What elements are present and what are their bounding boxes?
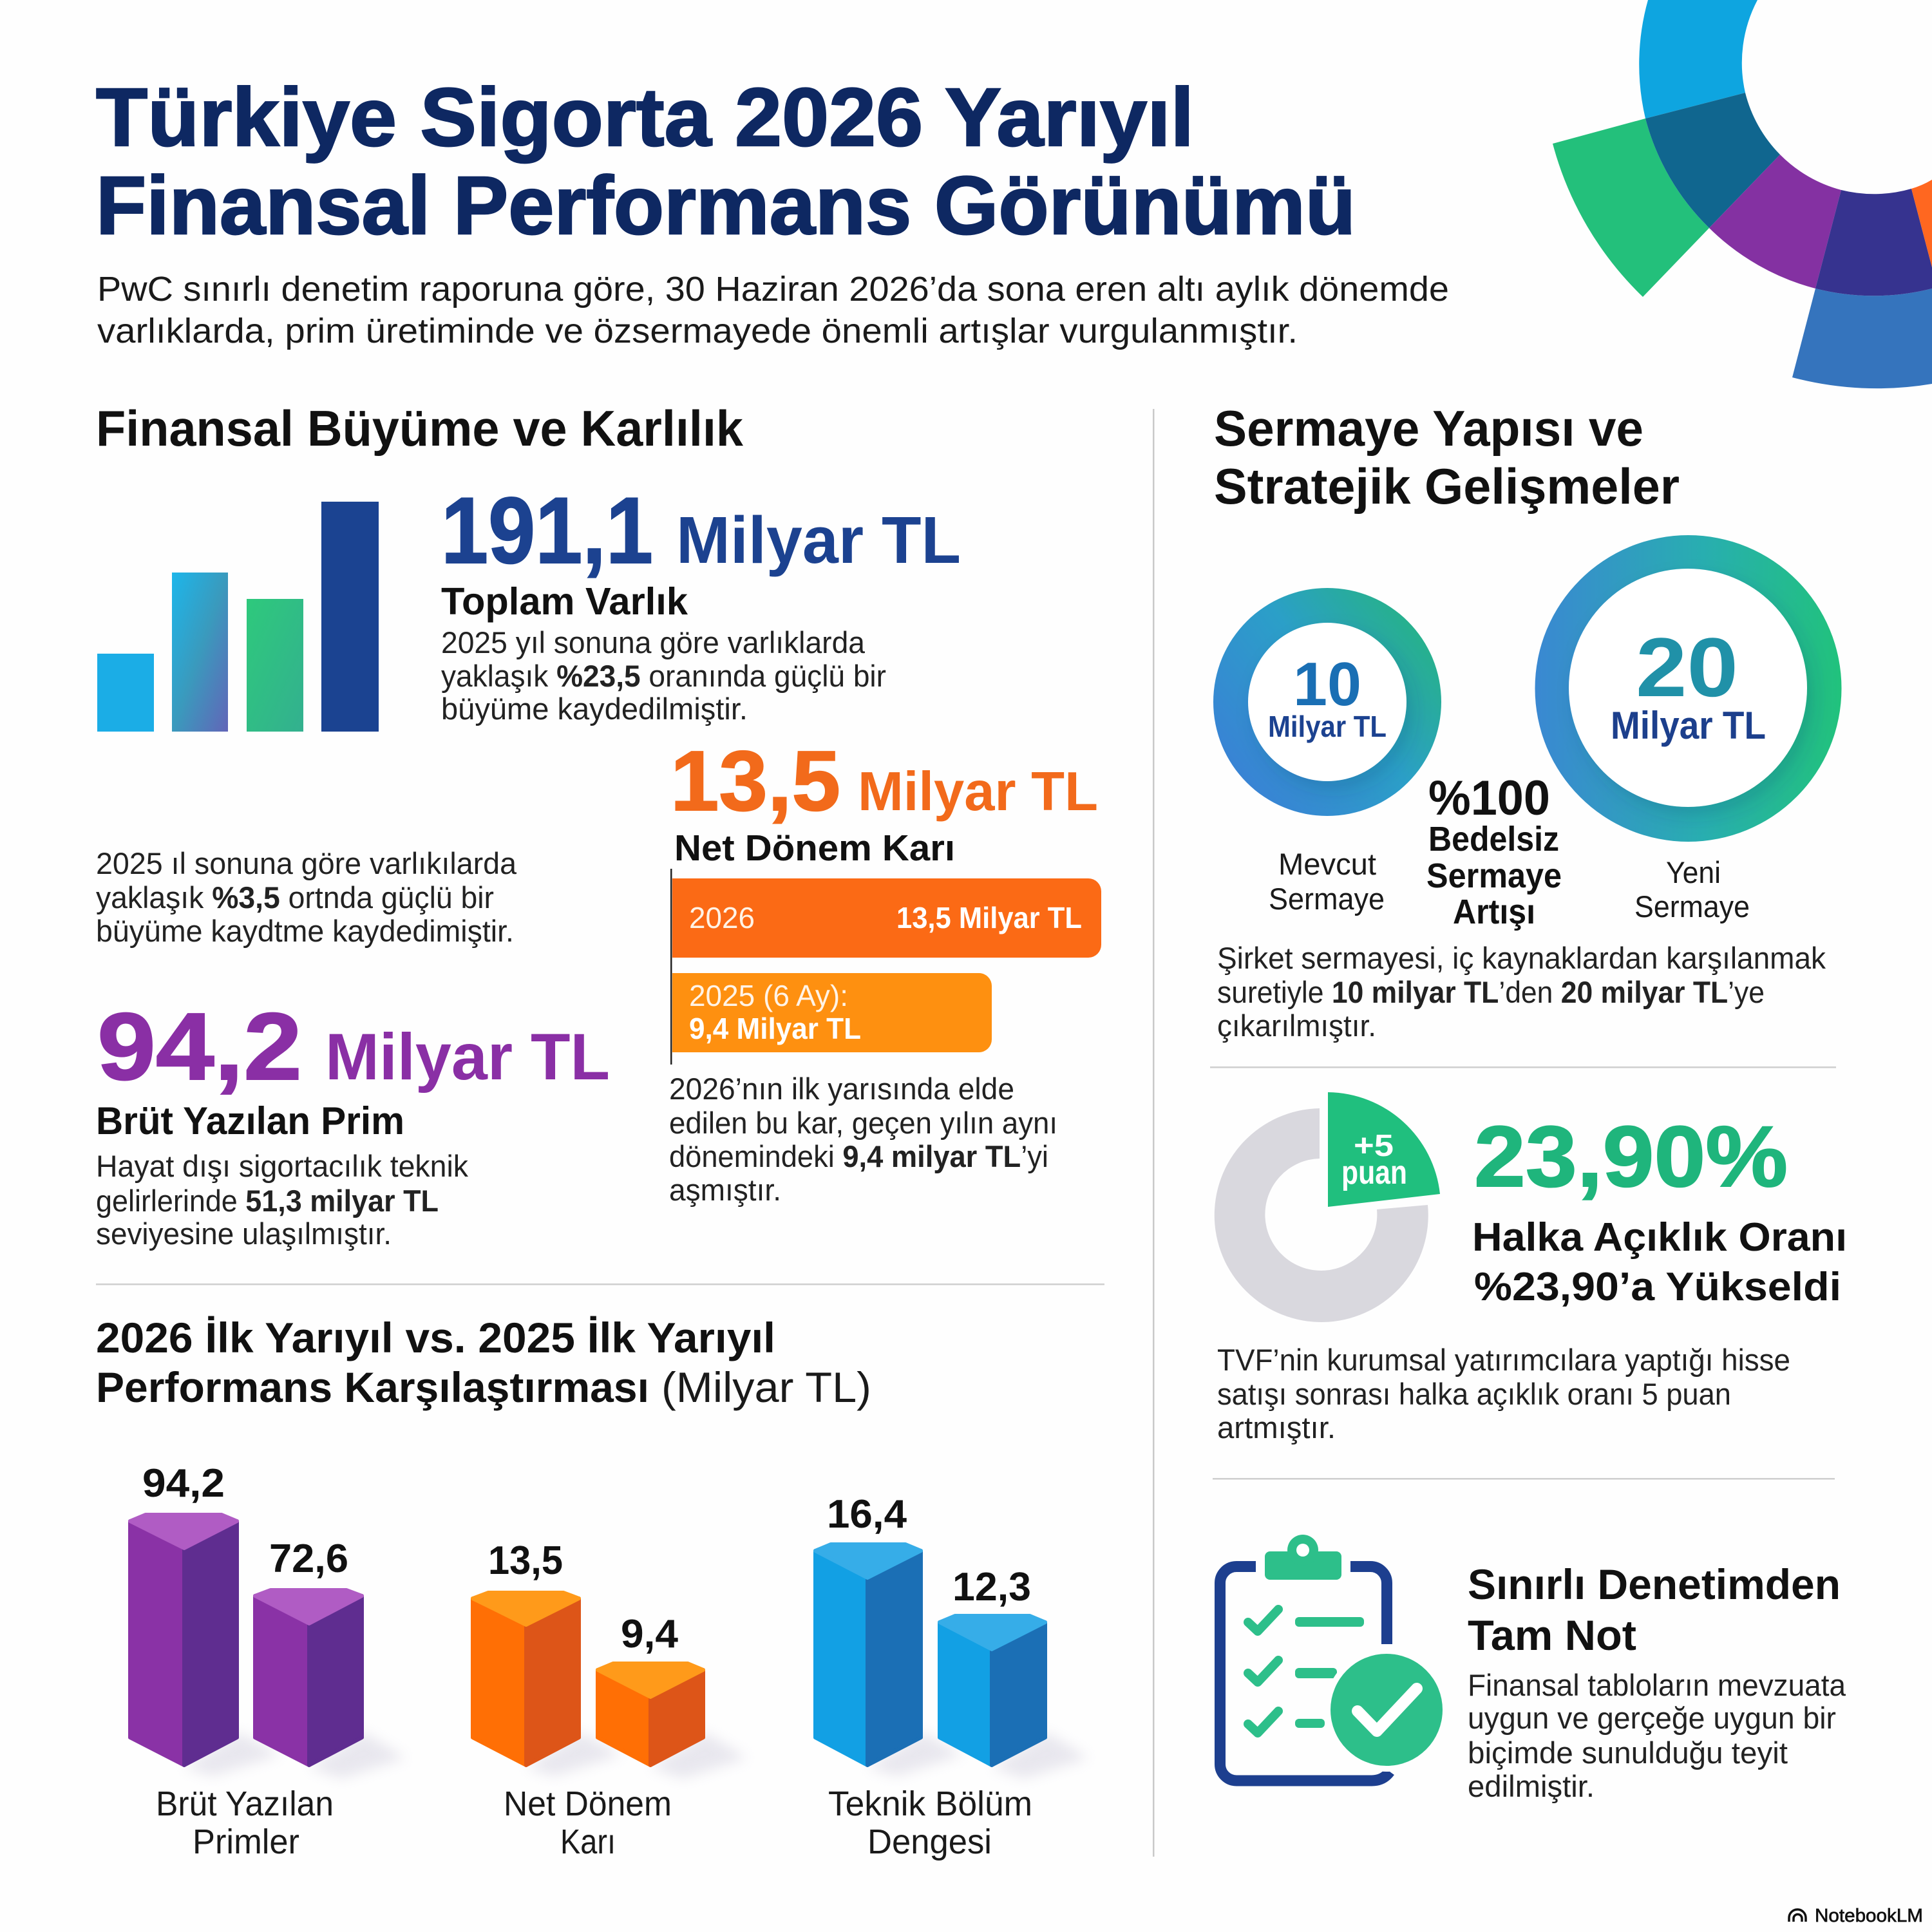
panel: financial growth and profitability (96, 400, 1101, 1251)
heading: Sermaye Yapısı ve Stratejik Gelişmeler (1214, 400, 1680, 515)
heading: comparison: Performans Karşılaştırması (96, 1363, 649, 1411)
text block: growth note (96, 846, 517, 948)
text block: growth note: büyüme kaydtme kaydedimiştir. (96, 914, 514, 948)
section divider (1210, 1066, 1836, 1068)
text block: free float explanation (1217, 1343, 1790, 1444)
chart: net profit comparison bars: 13,5 Milyar TL (896, 901, 1082, 934)
text block: capital explanation: suretiyle 10 milyar TL’den 20 milyar TL’ye (1217, 975, 1765, 1009)
stat: net period profit: Net Dönem Karı (674, 828, 955, 869)
label: Mevcut Sermaye: Sermaye (1269, 882, 1385, 916)
stat: total assets: Milyar TL (676, 503, 961, 577)
title (96, 71, 1356, 252)
text block: audit explanation: biçimde sunulduğu teyit (1468, 1736, 1788, 1770)
chart: free float donut (1215, 1092, 1440, 1322)
stat: gross written premium (96, 994, 610, 1251)
text block: capital explanation: Şirket sermayesi, iç kaynaklardan karşılanmak (1217, 941, 1826, 975)
stat: gross written premium: Brüt Yazılan Prim (96, 1099, 404, 1142)
ring: new capital 20: Milyar TL (1611, 704, 1766, 747)
heading: Sınırlı Denetimden Tam Not (1468, 1560, 1841, 1659)
chart: free float donut: puan (1341, 1154, 1407, 1191)
stat: total assets: Toplam Varlık (441, 580, 688, 623)
icon: clipboard with check (1220, 1535, 1448, 1781)
NotebookLM logo: NotebookLM (1815, 1906, 1923, 1926)
stat: gross written premium: Hayat dışı sigortacılık teknik (96, 1149, 468, 1183)
text block: audit explanation: uygun ve gerçeğe uygun bir (1468, 1701, 1836, 1735)
bar shadows (184, 1732, 1088, 1779)
section divider (1213, 1478, 1835, 1480)
ring: current capital 10: Milyar TL (1268, 710, 1387, 743)
decorative ring graphic top right (1553, 0, 1932, 388)
chart: net profit comparison bars: 2026 (689, 901, 755, 934)
ring: new capital 20 (1535, 535, 1842, 842)
text block: audit explanation: Finansal tabloların mevzuata (1468, 1668, 1846, 1702)
section divider (96, 1283, 1104, 1285)
label: Net Dönem Karı (504, 1785, 672, 1861)
heading: Sermaye Yapısı ve Stratejik Gelişmeler: Sermaye Yapısı ve (1214, 400, 1643, 457)
label: Brüt Yazılan Primler: Primler (193, 1823, 299, 1861)
label: Yeni Sermaye: Sermaye (1634, 889, 1750, 923)
chart: net profit comparison bars (670, 869, 1101, 1065)
title: Finansal Performans Görünümü (96, 160, 1356, 252)
chart: free float donut: +5 (1354, 1129, 1394, 1163)
panel: capital structure (1213, 400, 1842, 1043)
label: Teknik Bölüm Dengesi (828, 1785, 1032, 1861)
stat: net period profit: Milyar TL (858, 761, 1098, 822)
text block: capital explanation: çıkarılmıştır. (1217, 1009, 1376, 1043)
text block: growth note: yaklaşık %3,5 ortnda güçlü bir (96, 880, 494, 914)
stat: total assets (441, 478, 961, 726)
label: Brüt Yazılan Primler: Brüt Yazılan (156, 1785, 334, 1823)
stat: total assets: büyüme kaydedilmiştir. (441, 692, 748, 726)
bar: 13,5: 13,5 (488, 1539, 563, 1583)
text block: free float explanation: artmıştır. (1217, 1410, 1336, 1444)
subtitle: varlıklarda, prim üretiminde ve özsermayede önemli artışlar vurgulanmıştır. (97, 312, 1298, 350)
heading: free float (1472, 1215, 1847, 1309)
stat: total assets: yaklaşık %23,5 oranında güçlü bir (441, 659, 886, 693)
text block: capital explanation (1217, 941, 1826, 1043)
heading: comparison (96, 1314, 871, 1411)
ring: current capital 10 (1213, 588, 1441, 816)
bar: 72,6: 72,6 (269, 1537, 348, 1581)
text block: audit explanation: edilmiştir. (1468, 1769, 1595, 1803)
ring: new capital 20: 20 (1636, 620, 1738, 714)
heading: comparison: (Milyar TL) (661, 1363, 871, 1411)
text block: growth note: 2025 ıl sonuna göre varlıkılarda (96, 846, 517, 880)
callout: 100% bonus capital increase: Sermaye (1426, 857, 1562, 895)
stat: total assets: 191,1 (441, 478, 653, 583)
heading: Sınırlı Denetimden Tam Not: Tam Not (1468, 1611, 1636, 1659)
stat: gross written premium: gelirlerinde 51,3 milyar TL (96, 1184, 439, 1218)
panel: limited audit (1220, 1535, 1846, 1803)
text block: profit explanation (669, 1072, 1057, 1207)
bar group: Brüt Yazılan Primler (130, 1461, 362, 1861)
bar: 94,2: 94,2 (142, 1461, 225, 1506)
label: Yeni Sermaye (1634, 855, 1750, 923)
label: Teknik Bölüm Dengesi: Dengesi (867, 1823, 992, 1861)
label: Yeni Sermaye: Yeni (1666, 855, 1721, 889)
heading: comparison: 2026 İlk Yarıyıl vs. 2025 İlk Yarıyıl (96, 1314, 775, 1361)
stat: 23,90%: 23,90% (1474, 1109, 1788, 1205)
label: Brüt Yazılan Primler (156, 1785, 334, 1861)
heading: free float: Halka Açıklık Oranı (1472, 1215, 1847, 1260)
stat: gross written premium: Milyar TL (325, 1020, 610, 1094)
text block: profit explanation: 2026’nın ilk yarısında elde (669, 1072, 1014, 1106)
subtitle (97, 270, 1449, 350)
text block: free float explanation: satışı sonrası halka açıklık oranı 5 puan (1217, 1377, 1731, 1411)
heading: Sermaye Yapısı ve Stratejik Gelişmeler: Stratejik Gelişmeler (1214, 458, 1680, 515)
bar: 72,6 (255, 1537, 362, 1765)
column divider (1153, 409, 1154, 1857)
stat: total assets: 2025 yıl sonuna göre varlıklarda (441, 625, 866, 659)
heading: free float: %23,90’a Yükseldi (1474, 1265, 1841, 1309)
label: Teknik Bölüm Dengesi: Teknik Bölüm (828, 1785, 1032, 1823)
text block: profit explanation: dönemindeki 9,4 milyar TL’yi (669, 1139, 1048, 1173)
label: Net Dönem Karı: Net Dönem (504, 1785, 672, 1823)
bar: 16,4: 16,4 (827, 1492, 907, 1537)
callout: 100% bonus capital increase: Artışı (1453, 893, 1535, 931)
panel: free float ratio (1215, 1092, 1847, 1444)
bar group: Net Dönem Karı (473, 1539, 703, 1861)
callout: 100% bonus capital increase: %100 (1428, 771, 1550, 826)
subtitle: PwC sınırlı denetim raporuna göre, 30 Haziran 2026’da sona eren altı aylık dönemde (97, 270, 1449, 308)
bar: 12,3: 12,3 (952, 1565, 1031, 1609)
stat: gross written premium: 94,2 (97, 994, 302, 1100)
heading: Finansal Büyüme ve Karlılık: Finansal Büyüme ve Karlılık (96, 400, 744, 457)
bar: 9,4: 9,4 (621, 1612, 679, 1656)
panel: half-year comparison (96, 1314, 1088, 1861)
bar: 16,4 (815, 1492, 921, 1765)
stat: gross written premium: seviyesine ulaşılmıştır. (96, 1217, 392, 1251)
bar: 12,3 (940, 1565, 1045, 1765)
icon: rising bar chart (97, 502, 379, 732)
text block: profit explanation: edilen bu kar, geçen yılın aynı (669, 1106, 1057, 1140)
heading: Sınırlı Denetimden Tam Not: Sınırlı Denetimden (1468, 1560, 1841, 1608)
text block: profit explanation: aşmıştır. (669, 1173, 781, 1207)
label: Net Dönem Karı: Karı (560, 1823, 616, 1861)
text block: free float explanation: TVF’nin kurumsal yatırımcılara yaptığı hisse (1217, 1343, 1790, 1377)
ring: current capital 10: 10 (1293, 650, 1361, 719)
chart: net profit comparison bars: 2025 (6 Ay): (689, 979, 848, 1012)
label: Mevcut Sermaye (1269, 847, 1385, 916)
bar: 9,4 (598, 1612, 703, 1765)
bar group: Teknik Bölüm Dengesi (815, 1492, 1045, 1861)
label: Mevcut Sermaye: Mevcut (1278, 847, 1376, 881)
callout: 100% bonus capital increase (1426, 771, 1562, 931)
title: Türkiye Sigorta 2026 Yarıyıl (96, 71, 1194, 164)
callout: 100% bonus capital increase: Bedelsiz (1428, 820, 1559, 858)
stat: net period profit: 13,5 (670, 734, 840, 828)
chart: net profit comparison bars: 9,4 Milyar TL (689, 1012, 861, 1045)
bar: 13,5 (473, 1539, 579, 1765)
stat: net period profit (670, 734, 1098, 869)
bar: 94,2 (130, 1461, 237, 1765)
text block: audit explanation (1468, 1668, 1846, 1803)
